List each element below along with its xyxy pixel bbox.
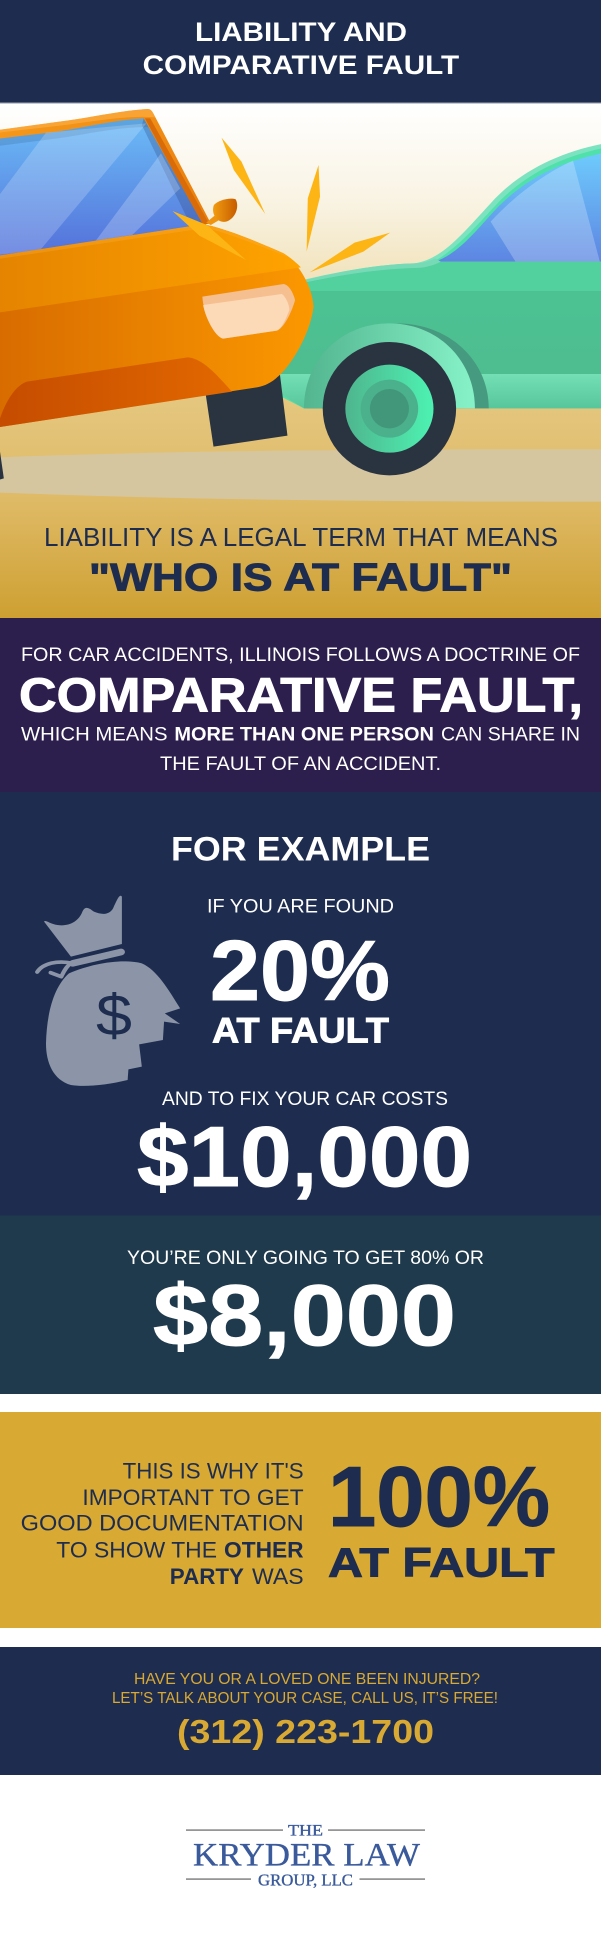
text block: documentation: THIS IS WHY IT'S (123, 1459, 304, 1484)
illustration: car crash scene (0, 104, 601, 618)
panel: comparative fault doctrine: CAN SHARE IN (441, 725, 580, 746)
panel: result 8,000 dollars: YOU’RE ONLY GOING TO GET 80% OR (127, 1248, 484, 1269)
logo: the kryder law group: KRYDER LAW (193, 1838, 421, 1874)
icon: money bag (37, 896, 180, 1086)
icon: money bag: $ (96, 983, 132, 1048)
intro text: who is at fault: LIABILITY IS A LEGAL TERM THAT MEANS (44, 524, 558, 552)
text block: documentation: TO SHOW THE (56, 1538, 217, 1563)
panel: comparative fault doctrine: THE FAULT OF AN ACCIDENT. (160, 754, 441, 775)
title: COMPARATIVE FAULT (143, 50, 460, 80)
panel: call to action (0, 1647, 601, 1775)
stat: 100 percent: 100% (328, 1450, 550, 1545)
text block: documentation: IMPORTANT TO GET (82, 1485, 304, 1510)
heading: for example: FOR EXAMPLE (171, 831, 430, 869)
text: if you are found: IF YOU ARE FOUND (207, 897, 394, 918)
headlight (202, 284, 295, 339)
text block: documentation: PARTY (170, 1564, 244, 1589)
intro text: who is at fault: "WHO IS AT FAULT" (89, 557, 512, 600)
panel: documentation callout (0, 1412, 601, 1628)
text block: documentation: GOOD DOCUMENTATION (21, 1511, 304, 1536)
title: LIABILITY AND (195, 17, 407, 47)
text: and to fix your car costs: AND TO FIX YOUR CAR COSTS (162, 1089, 448, 1110)
logo: the kryder law group (186, 1823, 425, 1890)
text: at fault: AT FAULT (212, 1012, 389, 1051)
panel: for example (0, 792, 601, 1216)
panel: comparative fault doctrine: MORE THAN ONE PERSON (174, 725, 434, 746)
impact sparks (172, 138, 390, 272)
stat: 10,000 dollars: $10,000 (137, 1110, 472, 1205)
green car (268, 144, 601, 475)
wheel arch (307, 323, 489, 408)
side mirror (206, 199, 237, 225)
panel: call to action: LET’S TALK ABOUT YOUR CASE, CALL US, IT’S FREE! (112, 1690, 498, 1707)
phone number: (312) 223-1700 (177, 1713, 434, 1750)
text block: documentation: OTHER (224, 1538, 304, 1563)
panel: comparative fault doctrine: WHICH MEANS (21, 725, 168, 746)
wheel (323, 342, 456, 475)
panel: result 8,000 dollars: $8,000 (153, 1268, 456, 1364)
panel: call to action: HAVE YOU OR A LOVED ONE BEEN INJURED? (134, 1671, 480, 1688)
text block: documentation (21, 1459, 304, 1589)
stat: 20 percent: 20% (210, 924, 390, 1019)
logo: the kryder law group: THE (288, 1823, 323, 1840)
text: at fault: AT FAULT (328, 1540, 555, 1586)
panel: result 8,000 dollars (0, 1216, 601, 1394)
panel: comparative fault doctrine: FOR CAR ACCIDENTS, ILLINOIS FOLLOWS A DOCTRINE OF (21, 645, 580, 666)
title (143, 17, 460, 80)
header banner (0, 0, 601, 104)
intro text: who is at fault (44, 524, 558, 600)
panel: comparative fault doctrine: COMPARATIVE FAULT, (19, 670, 583, 723)
panel: comparative fault doctrine (0, 618, 601, 792)
road band (0, 449, 601, 502)
orange car (0, 109, 314, 480)
text block: documentation: WAS (252, 1564, 304, 1589)
logo: the kryder law group: GROUP, LLC (258, 1871, 353, 1890)
